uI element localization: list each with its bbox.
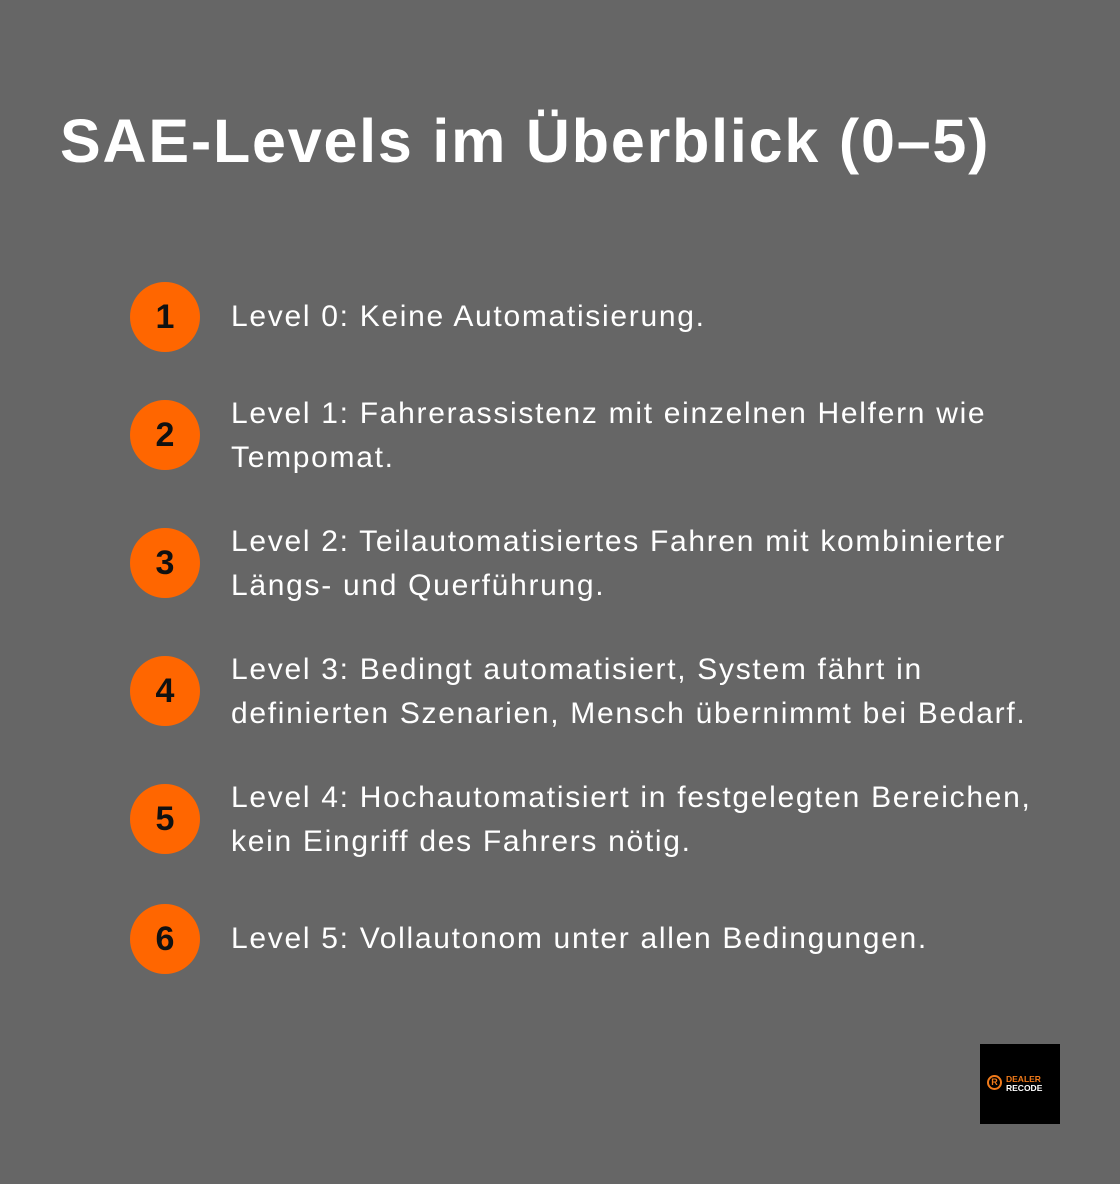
- badge 1: 1: [156, 298, 174, 336]
- text 1: Level 0: Keine Automatisierung.: [231, 300, 706, 333]
- logo text: RECODE: [1006, 1083, 1042, 1093]
- badge 6: [130, 904, 200, 974]
- badge 5: 5: [156, 800, 174, 838]
- badge 2: [130, 400, 200, 470]
- text 2: [231, 397, 986, 474]
- text 4: definierten Szenarien, Mensch übernimmt bei Bedarf.: [231, 697, 1026, 730]
- text 2: Level 1: Fahrerassistenz mit einzelnen Helfern wie: [231, 397, 986, 430]
- logo icon: R: [991, 1077, 998, 1087]
- badge 2: 2: [156, 416, 174, 454]
- text 4: Level 3: Bedingt automatisiert, System fährt in: [231, 653, 923, 686]
- text 5: kein Eingriff des Fahrers nötig.: [231, 825, 692, 858]
- logo text: [1006, 1074, 1042, 1093]
- badge 3: [130, 528, 200, 598]
- badge 5: [130, 784, 200, 854]
- logo: [980, 1044, 1060, 1124]
- badge 6: 6: [156, 920, 174, 958]
- text 3: Level 2: Teilautomatisiertes Fahren mit kombinierter: [231, 525, 1006, 558]
- logo icon: [987, 1075, 1002, 1090]
- text 3: Längs- und Querführung.: [231, 569, 605, 602]
- text 5: [231, 781, 1032, 858]
- text 2: Tempomat.: [231, 441, 395, 474]
- text 4: [231, 653, 1026, 730]
- text 5: Level 4: Hochautomatisiert in festgelegten Bereichen,: [231, 781, 1032, 814]
- badge 4: [130, 656, 200, 726]
- logo text: DEALER: [1006, 1074, 1041, 1084]
- badge 1: [130, 282, 200, 352]
- text 6: Level 5: Vollautonom unter allen Bedingungen.: [231, 922, 928, 955]
- badge 3: 3: [156, 544, 174, 582]
- badge 4: 4: [156, 672, 174, 710]
- title: SAE-Levels im Überblick (0–5): [60, 107, 990, 175]
- text 3: [231, 525, 1006, 602]
